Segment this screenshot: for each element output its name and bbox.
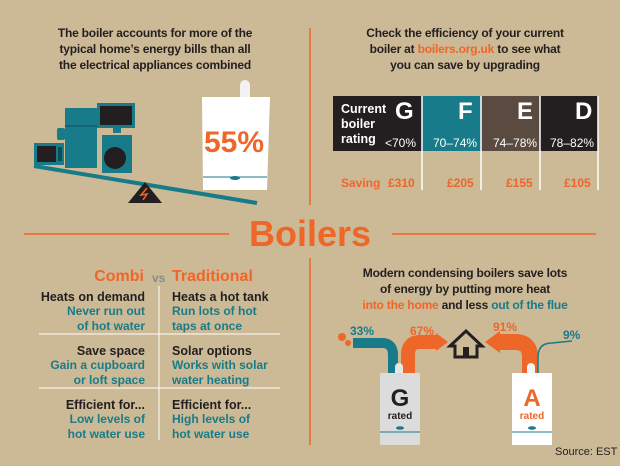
heading: boiler accounts xyxy=(58,26,252,72)
label: G rated: rated xyxy=(388,411,412,422)
panel: combi vs traditional: Gain a cupboard xyxy=(50,358,145,372)
heading: condensing boilers xyxy=(362,266,568,312)
panel: combi vs traditional: Solar options xyxy=(172,344,252,358)
rating table: Current xyxy=(341,102,386,116)
text: 91% xyxy=(493,320,517,334)
label: A rated: rated xyxy=(520,411,544,422)
panel: combi vs traditional: vs xyxy=(152,271,165,285)
panel: combi vs traditional: Low levels of xyxy=(70,412,145,426)
panel: combi vs traditional: Heats a hot tank xyxy=(172,290,269,304)
rating table: boiler xyxy=(341,117,375,131)
panel: combi vs traditional: Efficient for... xyxy=(172,398,251,412)
panel: combi vs traditional: Combi xyxy=(94,268,144,285)
rating table: <70% xyxy=(385,136,416,150)
rating table: 78–82% xyxy=(550,136,594,150)
heading: boiler accounts: The boiler accounts for more of the xyxy=(58,26,252,40)
rating table: G xyxy=(395,98,414,125)
rating table: 70–74% xyxy=(433,136,477,150)
heading: boiler accounts: typical home’s energy bills than all xyxy=(59,42,251,56)
rating table: D xyxy=(575,98,592,125)
rating table: Saving xyxy=(341,176,380,190)
icon: kettle xyxy=(57,128,65,140)
panel: combi vs traditional: Save space xyxy=(77,344,145,358)
panel: combi vs traditional: Run lots of hot xyxy=(172,304,257,318)
rating table: rating xyxy=(341,132,376,146)
rating table: 74–78% xyxy=(493,136,537,150)
heading: check efficiency xyxy=(366,26,564,72)
rating table: E xyxy=(517,98,533,125)
heading: check efficiency: boiler at boilers.org.uk to see what xyxy=(370,42,560,56)
panel: combi vs traditional: taps at once xyxy=(172,319,242,333)
heading: condensing boilers: Modern condensing boilers save lots xyxy=(363,266,567,280)
teal flue line A xyxy=(538,341,572,375)
stat: 55%: 55% xyxy=(204,126,264,159)
label: A rated: A xyxy=(523,385,541,412)
icon: fridge xyxy=(65,108,97,168)
label: A rated xyxy=(520,385,544,422)
panel: combi vs traditional: or loft space xyxy=(74,373,145,387)
panel: combi vs traditional: Never run out xyxy=(67,304,145,318)
panel: combi vs traditional xyxy=(39,268,280,441)
panel: combi vs traditional: hot water use xyxy=(68,427,145,441)
label: G rated: G xyxy=(391,385,409,412)
text: 9% xyxy=(563,328,580,342)
panel: combi vs traditional: High levels of xyxy=(172,412,250,426)
orange heat pipe G xyxy=(408,333,448,377)
text: 67% xyxy=(410,324,434,338)
label: G rated xyxy=(388,385,412,422)
beam xyxy=(34,166,257,203)
panel: combi vs traditional: water heating xyxy=(172,373,249,387)
panel: combi vs traditional: Efficient for... xyxy=(66,398,145,412)
title: Boilers: Boilers xyxy=(249,213,371,254)
rating table xyxy=(333,96,599,190)
seesaw illustration xyxy=(34,80,270,205)
panel: combi vs traditional: of hot water xyxy=(77,319,145,333)
rating table: F xyxy=(458,98,473,125)
panel: combi vs traditional: Works with solar xyxy=(172,358,268,372)
icon: house xyxy=(450,331,482,357)
labels: percentages: 33% xyxy=(350,324,374,338)
icon: microwave xyxy=(34,143,64,165)
source: Source: EST xyxy=(555,446,617,458)
panel: combi vs traditional: Traditional xyxy=(172,268,253,285)
diagram: boiler heat flow xyxy=(338,329,572,445)
heading: check efficiency: Check the efficiency of your current xyxy=(366,26,564,40)
boiler G xyxy=(380,363,420,445)
boiler A xyxy=(512,363,552,445)
heading: condensing boilers: of energy by putting more heat xyxy=(380,282,550,296)
panel: combi vs traditional: hot water use xyxy=(172,427,249,441)
rating table: £310 xyxy=(388,176,415,190)
heading: condensing boilers: into the home and less out of the flue xyxy=(362,298,568,312)
panel: combi vs traditional: Heats on demand xyxy=(41,290,145,304)
teal flue pipe G xyxy=(338,333,393,375)
heading: boiler accounts: the electrical appliances combined xyxy=(59,58,251,72)
fulcrum xyxy=(128,182,162,203)
rating table: £105 xyxy=(564,176,591,190)
rating table: £155 xyxy=(506,176,533,190)
boiler white xyxy=(202,80,270,190)
heading: check efficiency: you can save by upgrading xyxy=(390,58,540,72)
icon: washing machine xyxy=(102,135,132,173)
rating table: £205 xyxy=(447,176,474,190)
icon: tv xyxy=(97,103,135,133)
orange heat pipe A xyxy=(485,331,530,377)
